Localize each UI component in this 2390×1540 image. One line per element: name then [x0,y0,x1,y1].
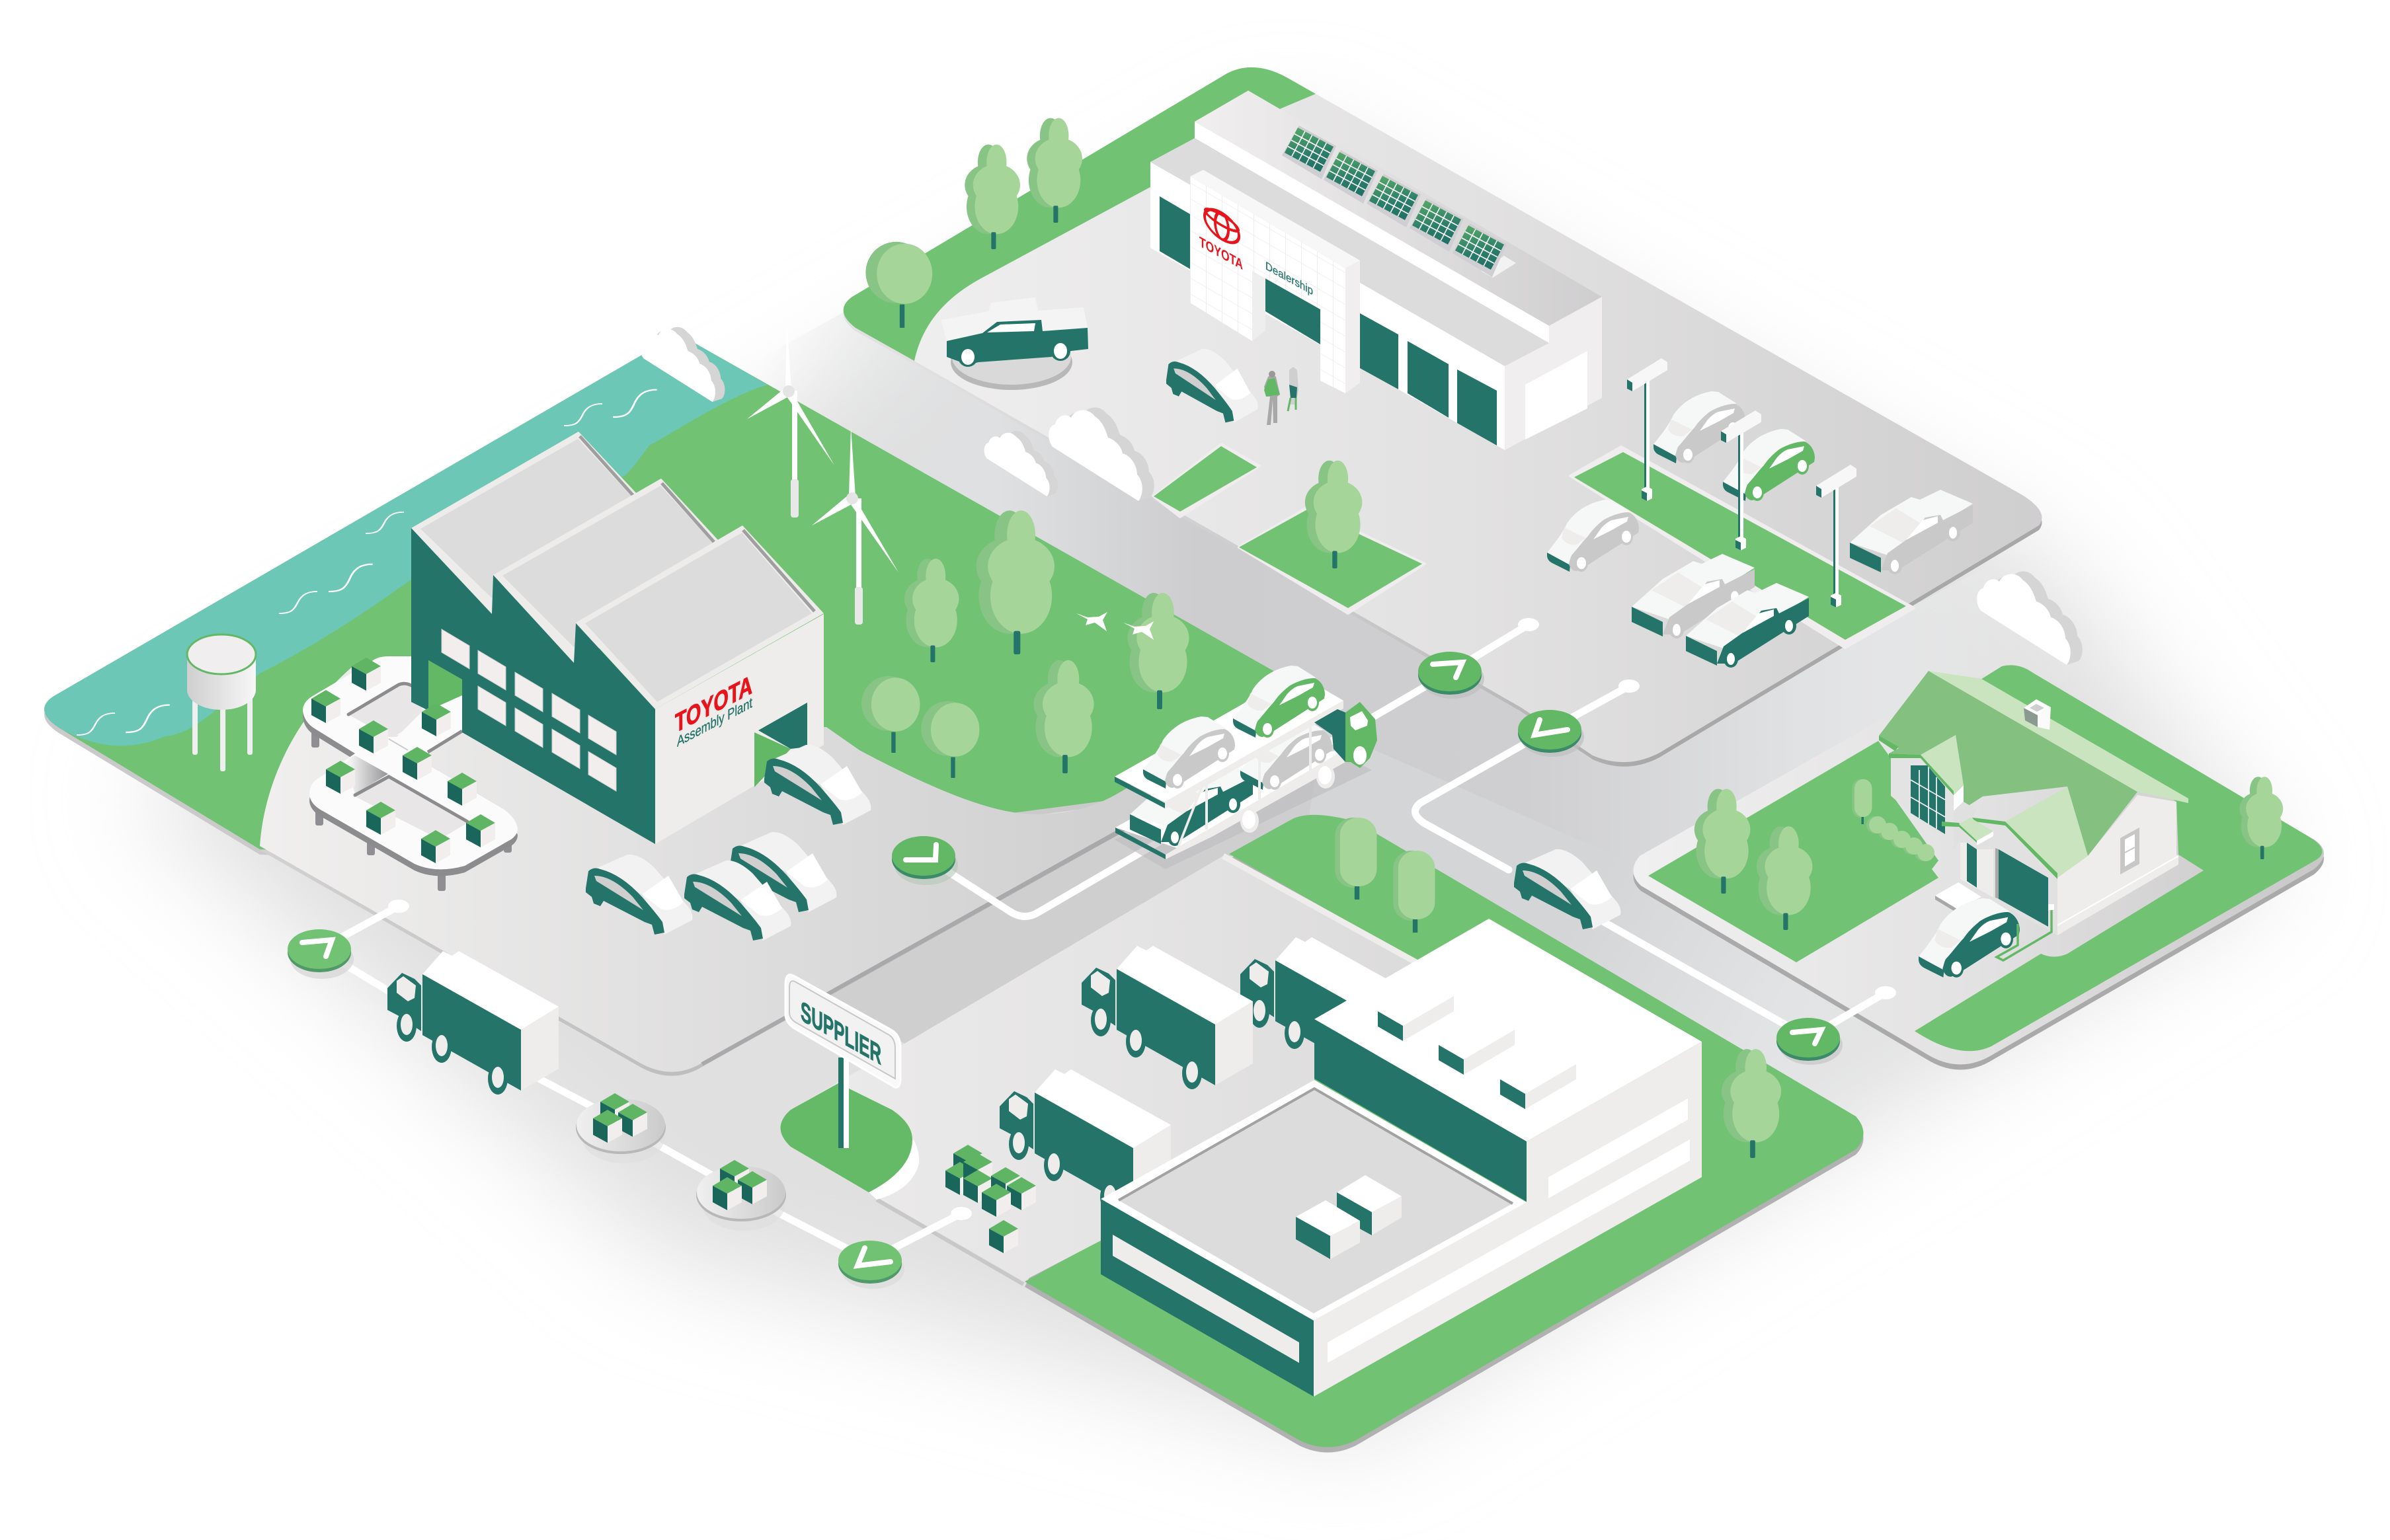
front lawn [1648,741,1938,962]
parking cars and lamps [1547,358,1973,668]
route badge: plant exit [892,836,958,885]
road edge line [702,823,1134,1064]
lower car [1240,718,1332,790]
plant label: TOYOTA [675,669,752,739]
background soft shadow [132,132,2281,1441]
main road network [740,311,2083,1137]
pavement [780,856,1416,1281]
sign panel [785,975,900,1087]
sign pole [838,1058,849,1148]
conveyor boxes [311,658,495,863]
trailer side [1166,750,1345,859]
panel: house land [1633,665,2324,1070]
right cloud [1977,571,2083,665]
tractor [1314,709,1345,762]
upper roof [1314,919,1702,1141]
water tower [187,635,256,771]
panel: supplier land [780,815,1863,1453]
upper cars [1143,716,1235,789]
panel: assembly plant land [44,334,1279,865]
waves [77,390,657,735]
supplier trees [1335,818,1435,933]
clouds over road [984,407,1154,501]
right wall [2057,795,2178,935]
transporter shadow [1114,760,1372,869]
charging car and cable [1919,898,2054,978]
house [1879,671,2188,935]
panel: dealership land [844,67,2042,767]
transporter posts and wheels [1177,725,1335,847]
sign text: SUPPLIER [801,995,881,1071]
garage wall [1960,823,2057,935]
garage door [1995,848,2048,927]
dealership label: Dealership [1265,258,1313,297]
lower hole [355,778,467,839]
wall windows [1328,1098,1690,1363]
plant sublabel: Assembly Plant [677,694,752,750]
front door [1960,843,1993,898]
teal wall [1314,1019,1527,1202]
lamp [1721,410,1761,551]
windows [442,629,616,791]
lawn trees [1694,777,2283,930]
supplier sign [785,975,900,1148]
stop pad 1 [576,1093,666,1163]
dealership car [1166,349,1258,422]
light wall [1314,1042,1702,1397]
conveyor belts [303,656,518,891]
green ground [1025,815,1863,1447]
side window [2120,828,2139,874]
main roof [1879,671,2137,856]
birds [1076,612,1154,640]
roof 2 [493,479,742,663]
route badge: supplier [838,1241,904,1289]
dealership trees [865,118,1362,568]
route badge: lot [1518,710,1584,757]
upper deck [1115,671,1343,802]
lower deck [1115,750,1344,848]
gables [1921,735,1964,795]
upper hole [348,682,423,737]
pickup on turntable [941,297,1088,390]
route badge: dealership [1418,652,1484,699]
dealership logo text: TOYOTA [1199,233,1243,273]
eaves [1879,736,2057,879]
route badge: home [1776,1018,1843,1065]
teal front [1101,1199,1314,1397]
front wall [655,614,824,844]
finished cars at plant [586,745,871,941]
factory side wall [411,528,655,844]
field trees [861,510,1189,778]
route end dots [388,618,1896,1220]
entry roof [1959,818,1993,841]
doorstep [1935,882,1981,913]
side wall [1505,297,1602,450]
lamp [1627,358,1667,501]
toyota emblem [1205,203,1239,249]
left delivery truck [387,951,559,1095]
showroom glass [1160,196,1497,445]
water [44,334,768,746]
supplier building [1101,919,1702,1397]
supplier right tree [1722,1049,1781,1158]
garage door [754,703,807,787]
lower pickup [1130,761,1253,846]
green field [44,334,1279,859]
green lawn [844,67,1316,361]
roof boxes [1296,1175,1402,1259]
lower roof [1101,1080,1527,1321]
road car [1514,849,1620,929]
delivery trucks at supplier [1000,937,1412,1213]
roof 1 [411,432,659,614]
roof vents [1378,996,1576,1109]
pavement [914,94,2042,762]
route lines [319,625,1886,1260]
stop pad 2 [696,1160,786,1231]
cloud over water [641,327,725,402]
panel: assembly plant pavement [260,656,1190,1076]
assembly plant building [411,432,824,844]
car transporter [1114,666,1377,869]
shrubs [1866,816,1934,861]
left wing wall [1891,758,1954,851]
wind turbine 2 [812,427,898,625]
dealership building [1150,91,1602,450]
sign bed [780,1083,919,1200]
green yard [1915,665,2322,1051]
planting beds [1154,444,1259,517]
front wall [1150,162,1505,450]
picture window [1911,765,1945,834]
route badge: plant inbound [288,929,354,979]
upper roof [1195,91,1602,326]
lamp [1816,465,1856,607]
customers [1264,367,1298,425]
roof 3 [576,525,824,709]
chimney [2024,699,2051,730]
solar panels [1282,126,1516,278]
lower roof [1150,138,1549,366]
entrance portal [1190,170,1360,268]
wind turbine 1 [747,319,834,518]
supplier box cluster [945,1145,1036,1253]
